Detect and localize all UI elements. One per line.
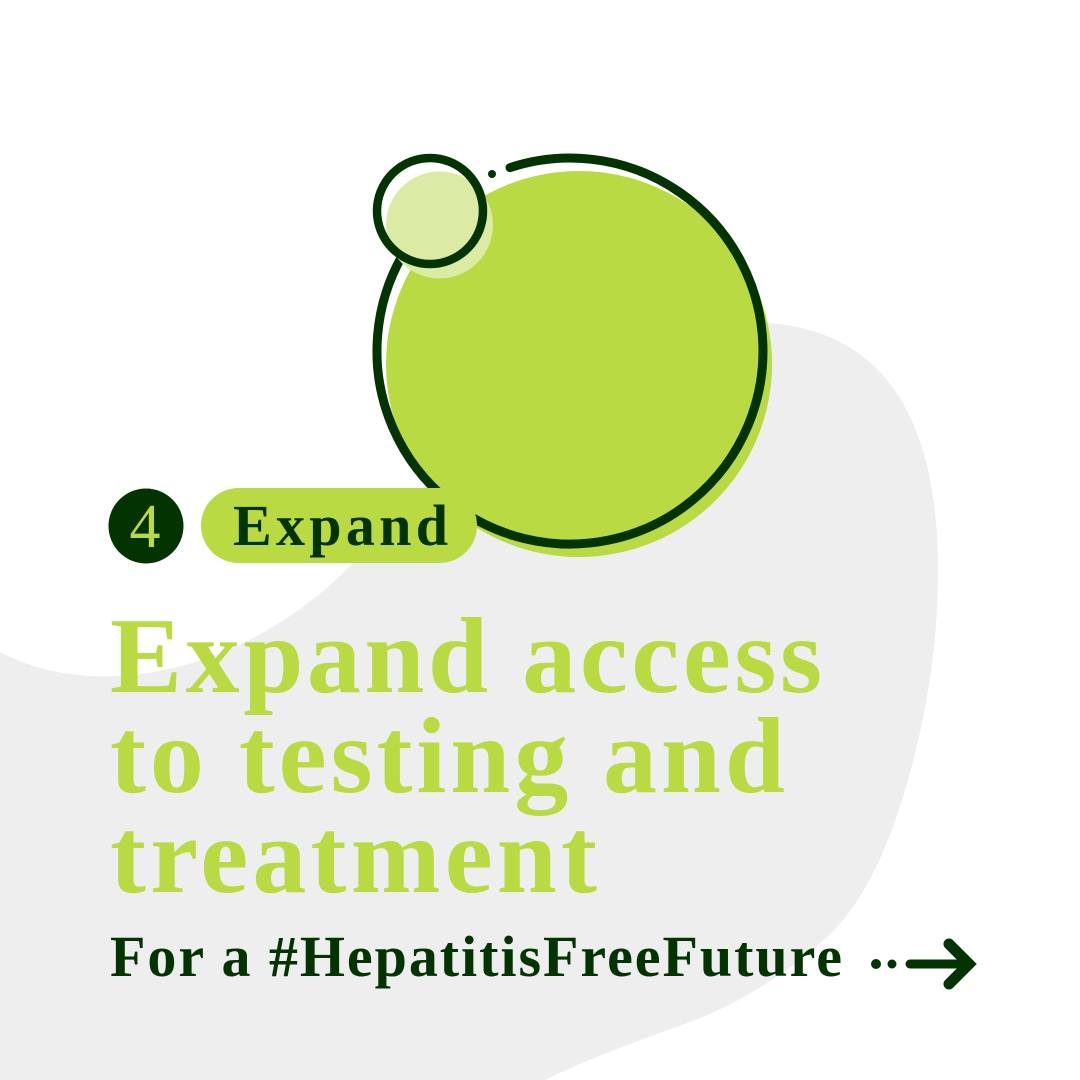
headline: treatment <box>110 797 597 916</box>
label pill <box>201 488 477 563</box>
main green circle <box>386 171 772 557</box>
number badge <box>108 488 184 564</box>
small ring <box>377 158 483 264</box>
label pill: Expand <box>233 493 448 558</box>
background blob <box>0 323 938 1080</box>
headline: to testing and <box>110 697 785 816</box>
number badge: 4 <box>130 493 160 561</box>
outline ring <box>377 158 763 544</box>
arrow <box>871 944 970 984</box>
headline: Expand access <box>110 597 822 716</box>
small dot <box>488 170 496 178</box>
small light circle <box>386 172 493 278</box>
tagline: For a #HepatitisFreeFuture <box>110 924 842 989</box>
headline <box>110 597 822 916</box>
